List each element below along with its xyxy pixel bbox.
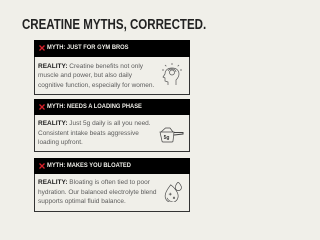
reality text: REALITY: Just 5g daily is all you need. [38,120,151,127]
icon: scoop 5g: 5g [164,134,169,140]
reality text: supports optimal fluid balance. [38,198,126,205]
myth header: MYTH: JUST FOR GYM BROS [47,44,129,51]
title: CREATINE MYTHS, CORRECTED. [21,17,206,33]
myth header: MYTH: MAKES YOU BLOATED [47,162,131,168]
reality text: muscle and power, but also daily [38,72,132,79]
reality text: REALITY: Bloating is often tied to poor [38,179,150,186]
reality text [38,62,154,88]
myth header [34,98,190,115]
reality text: cognitive function, especially for women. [38,82,154,88]
reality text: Consistent intake beats aggressive [38,130,139,136]
icon: brain head [162,63,182,85]
panel: myth bloated [34,158,190,212]
panel: myth loading phase [34,98,190,152]
myth header: MYTH: NEEDS A LOADING PHASE [47,102,142,110]
icon: water drops [164,182,182,202]
myth header [34,158,190,174]
reality text: REALITY: Creatine benefits not only [38,62,143,70]
reality text: hydration. Our balanced electrolyte blend [38,188,157,196]
reality text [38,120,151,146]
icon: scoop 5g [160,128,184,142]
reality text: loading upfront. [38,139,83,146]
myth header [34,40,190,56]
panel: myth gym bros [34,40,190,94]
reality text [38,179,157,205]
